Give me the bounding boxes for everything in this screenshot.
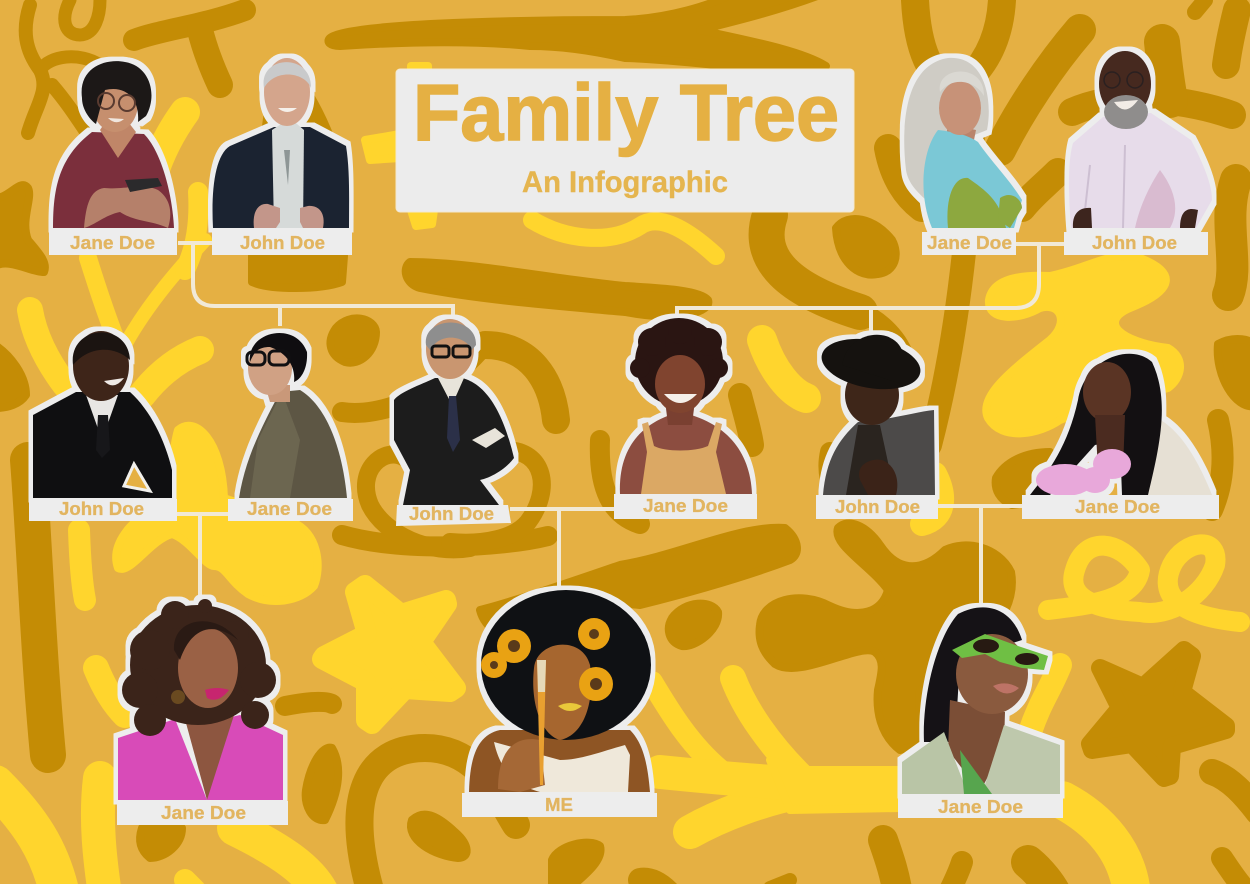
name label: [117, 801, 288, 825]
person: cousin Jane Doe pink: [117, 599, 288, 825]
name label: Jane Doe: [938, 797, 1023, 817]
portrait: [213, 58, 349, 228]
person: grandmother Jane Doe silver hair: [904, 58, 1022, 255]
name label: John Doe: [835, 497, 920, 517]
name label: Jane Doe: [161, 803, 246, 823]
person: aunt Jane Doe glasses: [228, 333, 353, 521]
portrait: [469, 590, 651, 792]
name label: ME: [545, 795, 573, 815]
connector: aunt and uncle to cousin: [177, 514, 228, 602]
portrait: [904, 58, 1022, 228]
name label: [462, 793, 657, 817]
portrait: [239, 333, 347, 498]
name label: [614, 494, 757, 519]
name label: Jane Doe: [1075, 497, 1160, 517]
portrait: [620, 318, 752, 494]
portrait: [33, 331, 172, 498]
person: uncle John Doe: [29, 331, 177, 521]
person: grandfather John Doe bald: [1064, 51, 1212, 255]
person: uncle John Doe hat: [816, 332, 938, 519]
name label: [396, 504, 511, 526]
name label: John Doe: [240, 233, 325, 253]
name label: [898, 795, 1063, 818]
person: me: [462, 590, 657, 817]
person: cousin Jane Doe green glasses: [898, 607, 1063, 818]
portrait: [53, 61, 174, 228]
portrait: [118, 599, 283, 800]
name label: John Doe: [59, 499, 144, 519]
portrait: [1030, 354, 1212, 496]
title: Family Tree: [413, 68, 839, 157]
name label: [1022, 495, 1219, 519]
person: grandfather John Doe: [212, 58, 352, 255]
portrait: [394, 319, 514, 505]
person: aunt Jane Doe braids: [1022, 354, 1219, 519]
connector: paternal grandparents to parents: [178, 243, 453, 326]
name label: John Doe: [409, 504, 494, 524]
name label: [49, 232, 177, 255]
connector: aunt and uncle to cousin right: [938, 506, 1022, 604]
name label: Jane Doe: [247, 499, 332, 519]
person: mother Jane Doe: [614, 318, 757, 519]
portrait: [1069, 51, 1212, 228]
person: father John Doe: [394, 319, 514, 526]
name label: [212, 232, 352, 255]
name label: John Doe: [1092, 233, 1177, 253]
name label: [1064, 232, 1208, 255]
name label: Jane Doe: [927, 233, 1012, 253]
name label: [29, 499, 177, 521]
subtitle: An Infographic: [522, 166, 728, 199]
person: grandmother Jane Doe: [49, 61, 177, 255]
portrait: [818, 332, 935, 495]
name label: Jane Doe: [643, 496, 728, 516]
connector: maternal grandparents to parents: [677, 244, 1064, 334]
connector: parents to me: [510, 509, 614, 592]
name label: [816, 495, 938, 519]
name label: Jane Doe: [70, 233, 155, 253]
portrait: [902, 607, 1060, 794]
name label: [228, 499, 353, 521]
title panel: [396, 68, 854, 212]
